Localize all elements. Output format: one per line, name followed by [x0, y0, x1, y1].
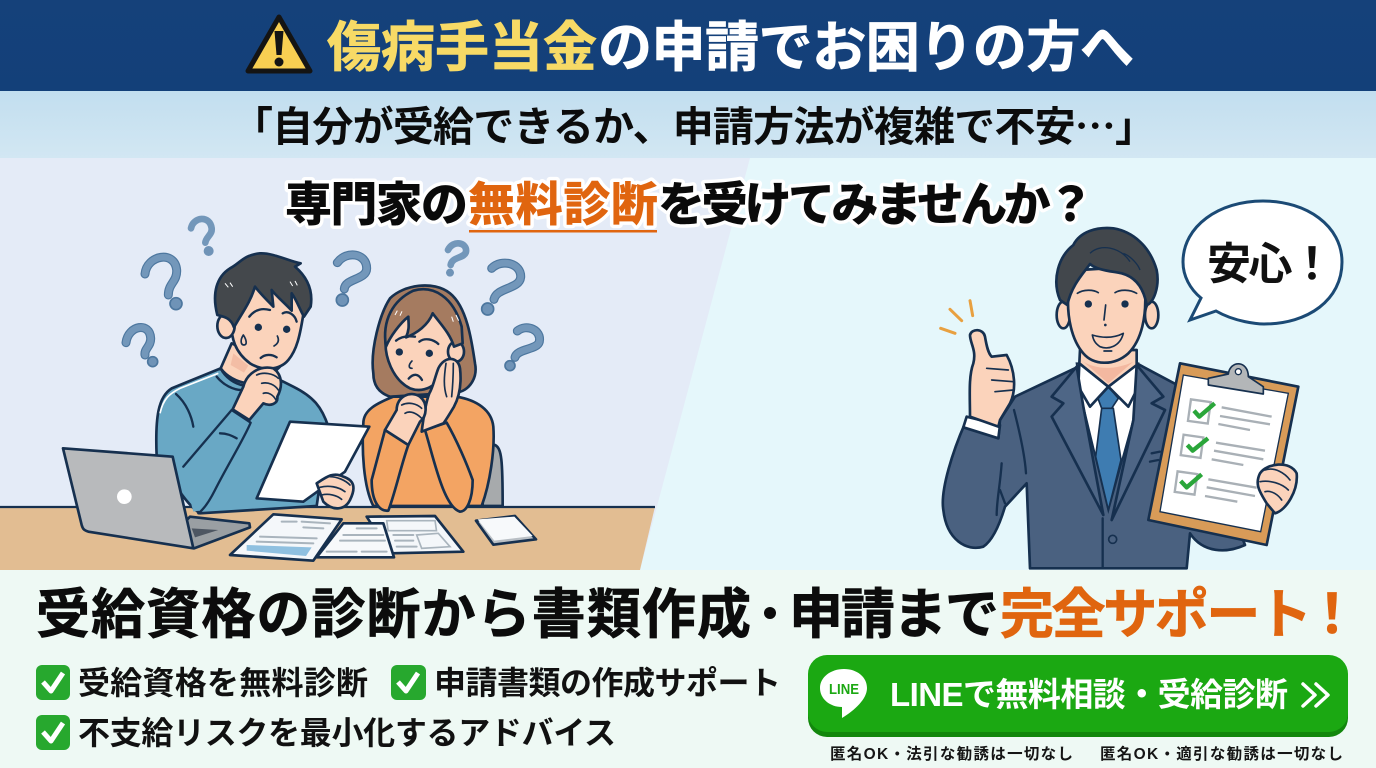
heading separator dot: [764, 607, 776, 619]
illustration: worried couple: [0, 219, 655, 570]
sparkle lines: [941, 301, 973, 333]
clipboard: [1148, 363, 1298, 545]
title: highlighted term: 傷病手当金: [327, 18, 597, 78]
expert body: [943, 363, 1245, 568]
underline: [469, 230, 657, 232]
heading exclamation: ！: [1305, 585, 1359, 645]
panel: middle background left: [0, 158, 750, 570]
small note left: 匿名OK・法引な勧誘は一切なし: [830, 744, 1073, 763]
table edge: [0, 503, 655, 510]
thumbs-up hand: [963, 330, 1014, 438]
title: remainder: の申請でお困りの方へ: [598, 18, 1134, 78]
closing question: を受けてみませんか？: [658, 178, 1094, 231]
checklist items: [1175, 399, 1272, 502]
icon: warning triangle: [248, 17, 310, 71]
panel: bottom background: [0, 570, 1376, 768]
man's hand on paper: [317, 475, 353, 508]
icon: LINE bubble: [820, 669, 867, 718]
icon: LINE bubble: LINE: [829, 681, 859, 698]
panel: middle background right: [0, 158, 1376, 570]
panel: header band: [0, 0, 1376, 91]
heading: complete support: [36, 585, 1359, 645]
subheading: free diagnosis invitation: 専門家の: [285, 178, 468, 231]
smartphone on table: [476, 516, 536, 545]
man: [156, 253, 328, 513]
table: [0, 507, 655, 570]
benefit: free eligibility check: 受給資格を無料診断: [78, 665, 368, 701]
benefit: risk advice: 不支給リスクを最小化するアドバイス: [78, 715, 616, 751]
LINE call-to-action button: [808, 655, 1348, 737]
documents on table: [230, 514, 463, 561]
speech bubble: [1183, 201, 1342, 324]
benefit: document support: 申請書類の作成サポート: [434, 665, 781, 701]
illustration: expert in suit: [941, 228, 1298, 568]
button text: LINEで無料相談・受給診断: [890, 676, 1288, 713]
panel: worry quote band: [0, 91, 1376, 158]
highlighted: free diagnosis: 無料診断: [468, 178, 658, 231]
speech bubble text: 安心！: [1207, 240, 1334, 289]
expert head: [1056, 228, 1158, 387]
heading: complete support: 受給資格の診断から書類作成: [36, 585, 751, 645]
laptop: [63, 448, 250, 548]
heading highlight: 完全サポート: [1000, 585, 1312, 645]
hand holding clipboard: [1258, 465, 1297, 513]
subheading: free diagnosis invitation: [285, 178, 1094, 231]
icon: double chevron: [1303, 684, 1328, 706]
heading: remaining words: 申請まで: [789, 585, 999, 645]
small note right: 匿名OK・適引な勧誘は一切なし: [1100, 744, 1343, 763]
paper in man's hand: [257, 422, 369, 502]
chair: [483, 443, 503, 506]
worry quote text: 「自分が受給できるか、申請方法が複雑で不安…」: [232, 93, 1156, 153]
question marks: [126, 219, 540, 371]
woman: [363, 285, 494, 512]
